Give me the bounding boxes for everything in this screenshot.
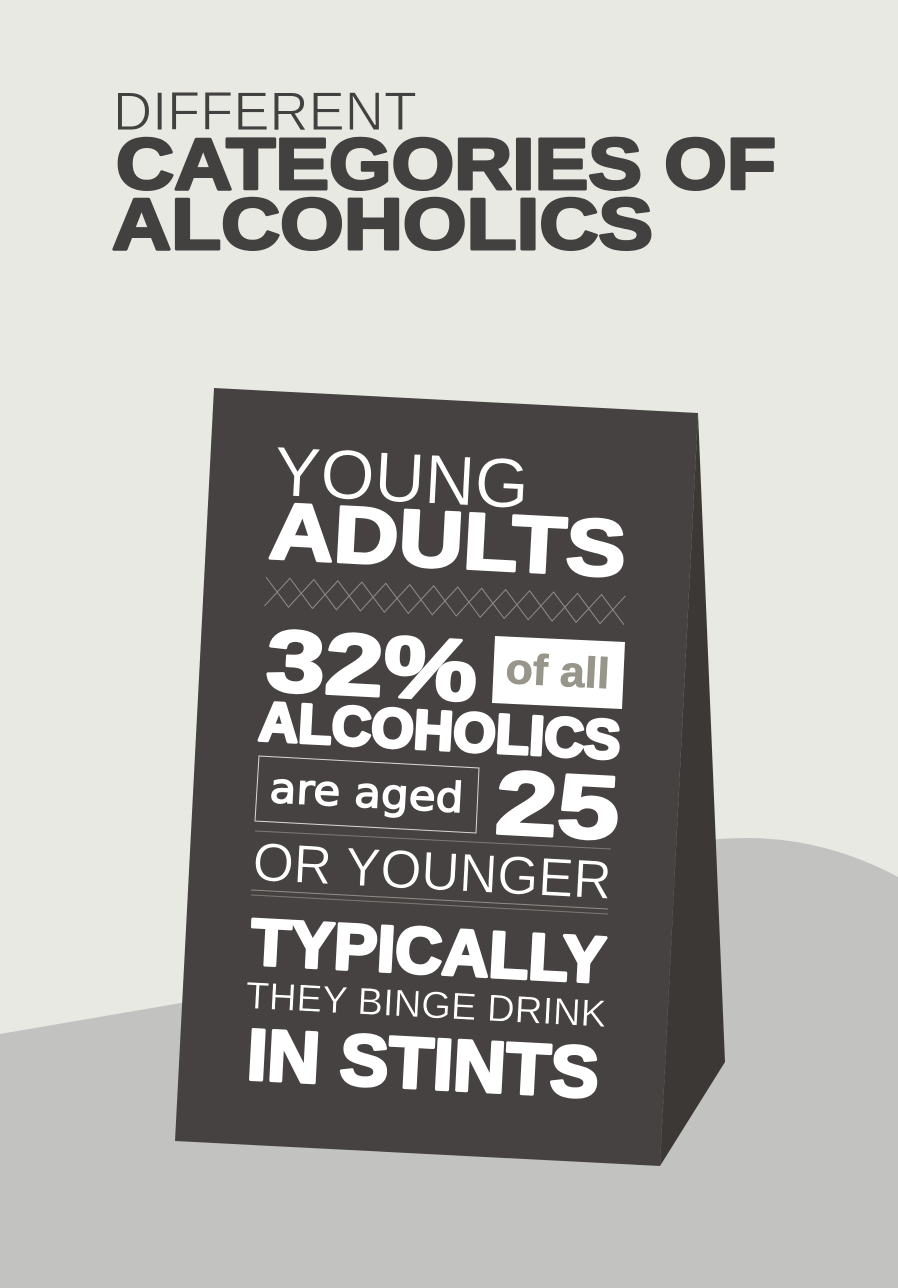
- stat: 25: 25: [493, 753, 622, 859]
- diamond lattice divider: [264, 577, 626, 625]
- sign side face: [660, 413, 725, 1166]
- in stints line: IN STINTS: [245, 1015, 601, 1113]
- of all label: [492, 636, 625, 709]
- outlined box: [255, 756, 479, 833]
- or younger line: OR YOUNGER: [251, 832, 613, 911]
- ground shape: [0, 838, 898, 1288]
- white box: [492, 636, 625, 709]
- stat: 32 percent: 32%: [264, 612, 480, 720]
- alcoholics line: ALCOHOLICS: [257, 690, 622, 771]
- title line: alcoholics: ALCOHOLICS: [112, 185, 653, 265]
- tent sign: [175, 388, 725, 1166]
- title: [112, 80, 776, 265]
- are aged text: are aged: [268, 764, 465, 822]
- title line: categories of: CATEGORIES OF: [116, 125, 776, 205]
- typically line: TYPICALLY: [249, 905, 608, 997]
- heading: adults: ADULTS: [267, 486, 628, 594]
- sign front face: [175, 388, 698, 1166]
- they binge drink line: THEY BINGE DRINK: [245, 975, 607, 1036]
- of all text: of all: [504, 645, 611, 698]
- are aged label: [255, 756, 479, 833]
- heading: young: YOUNG: [272, 432, 531, 523]
- title line: different: DIFFERENT: [113, 80, 417, 142]
